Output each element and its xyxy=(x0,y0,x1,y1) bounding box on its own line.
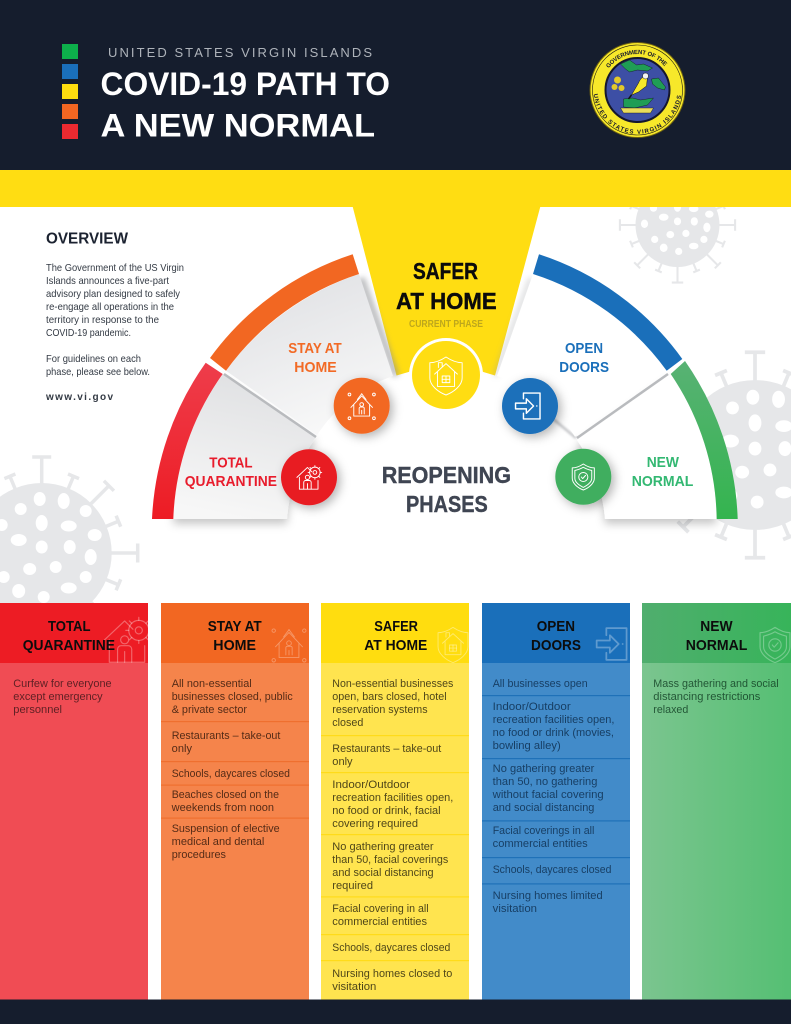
segment: new normal xyxy=(577,361,738,519)
label: stay at home: HOME xyxy=(294,359,337,376)
segment: total quarantine xyxy=(152,363,316,519)
guideline text: recreation facilities open, xyxy=(332,792,453,804)
heading: DOORS xyxy=(531,637,581,654)
label: reopening phases xyxy=(382,462,511,517)
heading: SAFER xyxy=(374,618,418,635)
guideline text: than 50, no gathering xyxy=(493,776,597,788)
guideline text: businesses closed, public xyxy=(172,691,293,703)
guideline text: procedures xyxy=(172,849,226,861)
label: total quarantine: TOTAL xyxy=(209,454,253,471)
overview text: advisory plan designed to safely xyxy=(46,288,181,300)
label: reopening phases: PHASES xyxy=(406,491,488,517)
guideline text: only xyxy=(172,743,192,755)
guideline text: Restaurants – take-out xyxy=(332,743,441,755)
label: open doors xyxy=(559,340,609,376)
label: new normal: NEW xyxy=(647,454,680,471)
guideline text: No gathering greater xyxy=(332,841,434,853)
heading: QUARANTINE xyxy=(23,637,115,654)
guideline text: medical and dental xyxy=(172,836,264,848)
guideline text: commercial entities xyxy=(332,916,428,928)
guideline text: distancing restrictions xyxy=(653,691,761,703)
dividers xyxy=(482,695,630,884)
guideline text: Non-essential businesses xyxy=(332,678,454,690)
seal of the US Virgin Islands: UNITED STATES VIRGIN ISLANDS xyxy=(594,94,681,134)
title: COVID-19 PATH TO xyxy=(100,66,390,102)
guideline text xyxy=(332,678,454,993)
heading xyxy=(364,618,427,654)
guideline text: All businesses open xyxy=(493,678,588,690)
guideline text: without facial covering xyxy=(492,789,604,801)
guideline text xyxy=(13,678,112,716)
icon: house with person and virus xyxy=(297,466,322,489)
overview text: Islands announces a five-part xyxy=(46,275,169,287)
guideline text: reservation systems xyxy=(332,704,428,716)
icon: ghost house with virus xyxy=(105,617,152,662)
circle: open doors xyxy=(502,378,558,434)
guideline text: Facial coverings in all xyxy=(493,825,594,837)
overview block xyxy=(45,230,184,403)
heading: TOTAL xyxy=(48,618,90,635)
label: new normal xyxy=(632,454,693,490)
seal of the US Virgin Islands xyxy=(590,42,686,138)
label: open doors: OPEN xyxy=(565,340,603,357)
label: current phase: CURRENT PHASE xyxy=(409,319,483,330)
footer band xyxy=(0,1000,791,1024)
guideline text: closed xyxy=(332,717,363,729)
circle: total quarantine xyxy=(281,449,337,505)
guideline text: & private sector xyxy=(172,704,247,716)
guideline text: except emergency xyxy=(13,691,103,703)
guideline text: Nursing homes limited xyxy=(493,890,603,902)
guideline text: no food or drink, facial xyxy=(332,805,441,817)
guideline text: recreation facilities open, xyxy=(493,714,614,726)
guideline text: open, bars closed, hotel xyxy=(332,691,447,703)
guideline text: visitation xyxy=(332,981,376,993)
overview text: phase, please see below. xyxy=(46,366,150,378)
panel: total quarantine xyxy=(0,603,152,1000)
overview text: For guidelines on each xyxy=(46,353,141,365)
title xyxy=(100,66,390,144)
heading xyxy=(686,618,747,654)
heading xyxy=(23,618,115,654)
guideline text: bowling alley) xyxy=(493,740,561,752)
guideline text: Schools, daycares closed xyxy=(172,768,290,780)
guideline text: Beaches closed on the xyxy=(172,789,279,801)
current phase circle xyxy=(409,338,483,412)
icon: person in house xyxy=(348,393,375,420)
overview text: COVID-19 pandemic. xyxy=(46,327,131,339)
decorative virus: left xyxy=(0,457,138,649)
label: total quarantine xyxy=(185,454,277,490)
segment: stay at home xyxy=(210,254,396,437)
heading: STAY AT xyxy=(208,618,262,635)
decorative virus: right xyxy=(652,352,791,558)
heading: AT HOME xyxy=(364,637,427,654)
guideline text: Schools, daycares closed xyxy=(493,864,611,876)
icon: ghost person in house xyxy=(272,629,306,662)
guideline text: Curfew for everyone xyxy=(13,678,112,690)
label: stay at home: STAY AT xyxy=(288,340,342,357)
segment: open doors xyxy=(495,254,682,438)
label: safer at home: SAFER xyxy=(413,258,478,284)
guideline text: Schools, daycares closed xyxy=(332,942,450,954)
guideline text: All non-essential xyxy=(172,678,252,690)
colour key squares xyxy=(62,44,78,139)
guideline text: Facial covering in all xyxy=(332,903,429,915)
label: new normal: NORMAL xyxy=(632,473,693,490)
label: safer at home xyxy=(396,258,497,314)
heading: NEW xyxy=(700,618,733,635)
guideline text: only xyxy=(332,756,353,768)
overview text: re-engage all operations in the xyxy=(46,301,174,313)
guideline text: Restaurants – take-out xyxy=(172,730,280,742)
icon: shield with check xyxy=(572,464,594,490)
decorative virus: top right xyxy=(620,167,735,283)
panel: open doors xyxy=(482,603,630,1000)
reopening gauge xyxy=(152,254,738,519)
heading: OPEN xyxy=(537,618,575,635)
guideline text: personnel xyxy=(13,704,62,716)
guideline text: Suspension of elective xyxy=(172,823,280,835)
guideline text: no food or drink (movies, xyxy=(493,727,614,739)
dividers xyxy=(321,735,469,961)
guideline text: Nursing homes closed to xyxy=(332,968,452,980)
icon: ghost shield with house xyxy=(438,627,468,663)
guideline text xyxy=(492,678,614,915)
guideline text: relaxed xyxy=(653,704,688,716)
guideline text: required xyxy=(332,880,373,892)
icon: ghost shield with check xyxy=(760,627,790,663)
heading xyxy=(208,618,262,654)
heading: NORMAL xyxy=(686,637,747,654)
guideline text: and social distancing xyxy=(332,867,434,879)
guideline text: Indoor/Outdoor xyxy=(332,779,410,791)
seal of the US Virgin Islands: GOVERNMENT OF THE xyxy=(606,50,668,68)
icon: shield with house xyxy=(430,357,462,395)
panel: new normal xyxy=(642,603,791,1000)
guideline text: Indoor/Outdoor xyxy=(493,701,571,713)
panel: safer at home xyxy=(321,603,469,1000)
heading: HOME xyxy=(213,637,256,654)
guideline text: No gathering greater xyxy=(493,763,595,775)
dividers xyxy=(161,721,309,819)
overview text xyxy=(46,262,184,378)
circle: new normal xyxy=(555,449,611,505)
label: total quarantine: QUARANTINE xyxy=(185,473,277,490)
website: www.vi.gov xyxy=(45,392,113,403)
heading xyxy=(531,618,581,654)
guideline text: commercial entities xyxy=(493,838,588,850)
icon: door with arrow xyxy=(516,393,540,419)
guideline text: and social distancing xyxy=(493,802,594,814)
guideline text xyxy=(171,678,293,861)
icon: ghost door with arrow xyxy=(597,628,627,660)
title: A NEW NORMAL xyxy=(100,108,375,144)
overview text: territory in response to the xyxy=(46,314,159,326)
yellow funnel xyxy=(352,206,540,376)
label: open doors: DOORS xyxy=(559,359,609,376)
guideline text: weekends from noon xyxy=(171,802,274,814)
guideline text: visitation xyxy=(493,903,537,915)
overview text: The Government of the US Virgin xyxy=(46,262,184,274)
panel: stay at home xyxy=(161,603,309,1000)
header band xyxy=(0,0,791,170)
subtitle: UNITED STATES VIRGIN ISLANDS xyxy=(108,45,372,60)
label: reopening phases: REOPENING xyxy=(382,462,511,488)
guideline text: covering required xyxy=(332,818,418,830)
guideline text xyxy=(653,678,779,716)
label: stay at home xyxy=(288,340,342,376)
circle: stay at home xyxy=(334,378,390,434)
overview heading: OVERVIEW xyxy=(46,230,129,248)
label: safer at home: AT HOME xyxy=(396,288,497,314)
yellow band xyxy=(0,170,791,207)
guideline text: Mass gathering and social xyxy=(653,678,779,690)
guideline text: than 50, facial coverings xyxy=(332,854,449,866)
